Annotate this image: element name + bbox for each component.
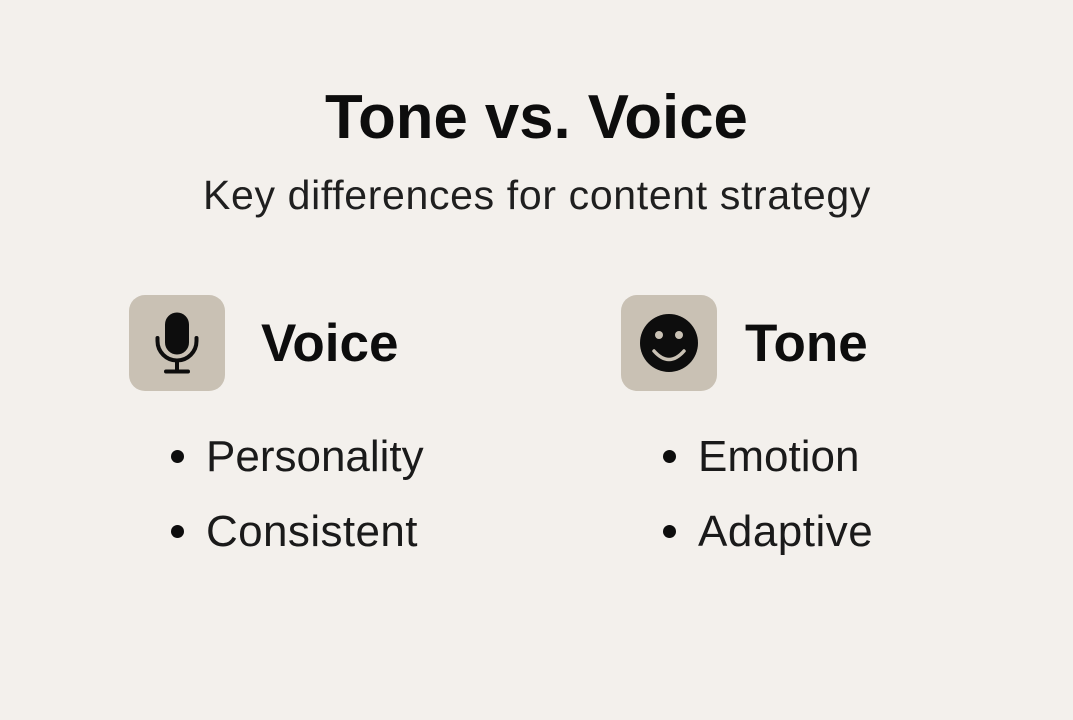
subtitle: Key differences for content strategy — [203, 172, 871, 218]
bullet: consistent: Consistent — [206, 507, 418, 556]
bullet: personality: Personality — [206, 432, 424, 481]
title: Tone vs. Voice — [325, 83, 748, 152]
panel: voice — [129, 295, 424, 556]
bullet: adaptive: Adaptive — [698, 507, 873, 556]
icon: microphone — [129, 295, 225, 391]
heading: tone: Tone — [745, 314, 868, 373]
panel: tone — [621, 295, 873, 556]
icon: smiley face — [621, 295, 717, 391]
heading: voice: Voice — [261, 314, 398, 373]
bullet: emotion: Emotion — [698, 432, 859, 481]
